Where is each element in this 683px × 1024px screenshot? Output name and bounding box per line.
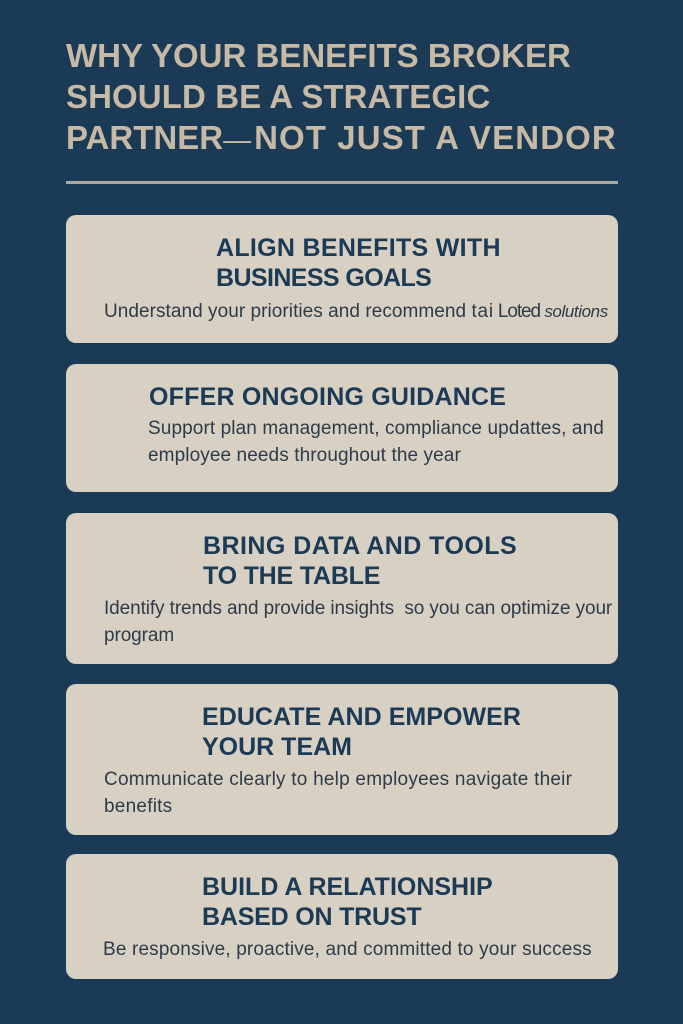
title: SHOULD BE A STRATEGIC xyxy=(66,78,490,115)
text: data and tools: Identify trends and provide insights so you can optimize your xyxy=(104,598,612,619)
heading: data and tools: BRING DATA AND TOOLS xyxy=(203,532,517,560)
title xyxy=(66,37,617,156)
text: ongoing guidance: Support plan management, compliance updattes, and xyxy=(148,418,604,439)
panel: relationship and trust xyxy=(66,854,618,979)
divider rule xyxy=(66,181,618,184)
heading: relationship and trust xyxy=(202,873,493,931)
panel: align benefits xyxy=(66,215,618,343)
heading: educate and empower: YOUR TEAM xyxy=(202,733,352,761)
heading: educate and empower xyxy=(202,703,521,761)
panel: data and tools xyxy=(66,513,618,664)
text: data and tools: program xyxy=(104,625,174,646)
title: WHY YOUR BENEFITS BROKER xyxy=(66,37,571,74)
panel: ongoing guidance xyxy=(66,364,618,492)
text: educate and empower xyxy=(104,769,572,817)
text: educate and empower: Communicate clearly to help employees navigate their xyxy=(104,769,572,790)
panel: educate and empower xyxy=(66,684,618,835)
text: ongoing guidance xyxy=(148,418,604,466)
heading: align benefits: ALIGN BENEFITS WITH xyxy=(216,234,501,262)
text: educate and empower: benefits xyxy=(104,796,172,817)
heading: align benefits xyxy=(216,234,501,292)
text: data and tools xyxy=(104,598,612,646)
heading: ongoing guidance: OFFER ONGOING GUIDANCE xyxy=(149,383,506,411)
heading: data and tools xyxy=(203,532,517,590)
text: relationship and trust: Be responsive, proactive, and committed to your success xyxy=(103,939,592,960)
heading: align benefits: BUSINESS GOALS xyxy=(216,264,431,292)
heading: educate and empower: EDUCATE AND EMPOWER xyxy=(202,703,521,731)
heading: relationship and trust: BUILD A RELATIONSHIP xyxy=(202,873,493,901)
heading: relationship and trust: BASED ON TRUST xyxy=(202,903,421,931)
heading: data and tools: TO THE TABLE xyxy=(203,562,380,590)
text: align benefits: Understand your priorities and recommend taiLoted solutions xyxy=(104,301,608,322)
title: PARTNER—NOT JUST A VENDOR xyxy=(66,119,617,156)
text: ongoing guidance: employee needs throughout the year xyxy=(148,445,461,466)
